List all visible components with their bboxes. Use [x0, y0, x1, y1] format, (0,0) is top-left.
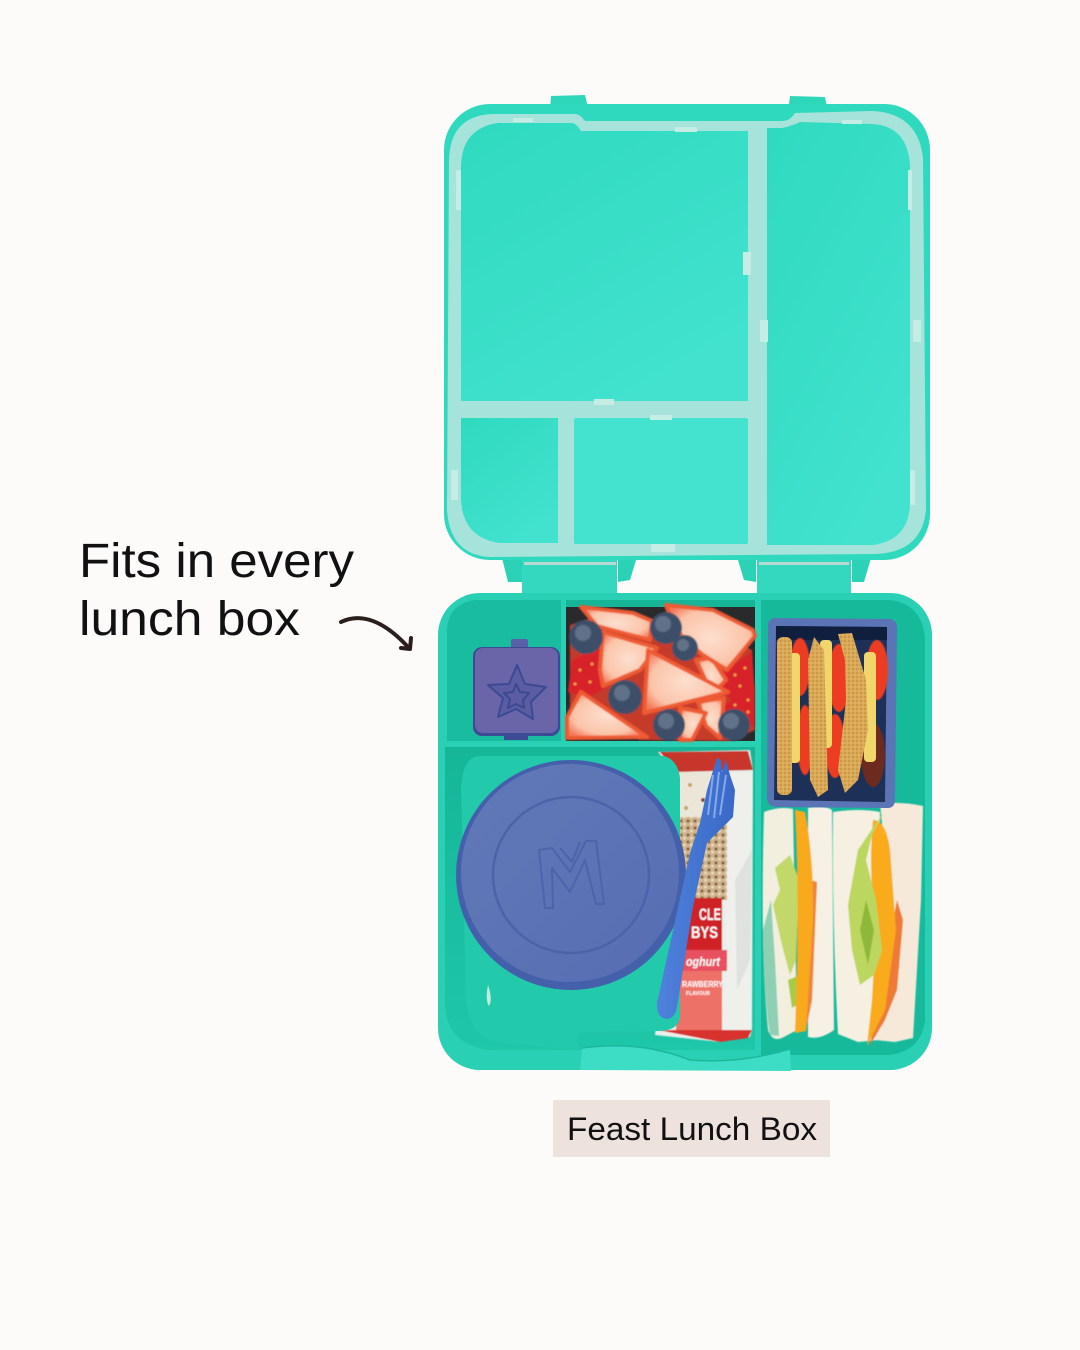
arrow: pointing to lunch box [341, 618, 411, 649]
lid compartment: right [767, 122, 910, 545]
sandwich right [833, 803, 923, 1046]
snack bar packet: CLE [699, 905, 721, 924]
lid hinges [502, 558, 871, 594]
snack bar packet: oghurt [686, 954, 721, 969]
spread container: star lid [473, 639, 560, 740]
star emboss [488, 665, 546, 719]
base compartment: small [447, 600, 561, 741]
dark tomato [861, 723, 885, 787]
base shell [438, 593, 932, 1070]
small blue box with crackers [767, 618, 897, 808]
heading: fits in every lunch box [79, 535, 354, 646]
sandwich left [763, 807, 834, 1039]
snack bar packet: RAWBERRY [682, 980, 724, 989]
caption label: Feast Lunch Box [567, 1111, 817, 1147]
base front clasp [580, 1046, 791, 1071]
strawberry slices [567, 605, 755, 740]
tray highlight [487, 985, 491, 1006]
lid seal [447, 111, 926, 557]
heading: fits in every lunch box: lunch box [79, 593, 300, 646]
logo M emboss [539, 841, 604, 908]
fork [657, 758, 735, 1019]
heading: fits in every lunch box: Fits in every [79, 535, 354, 588]
caption label [553, 1100, 830, 1157]
fruit underlay [570, 615, 755, 741]
box [767, 618, 897, 808]
base compartment: main [445, 747, 755, 1050]
lid shell [444, 104, 930, 560]
container lid: round blue [456, 760, 686, 990]
lunch box base [438, 593, 932, 1070]
lunch box lid [444, 95, 930, 594]
snack bar packet [655, 750, 753, 1042]
crackers [777, 633, 868, 797]
tomato slices [790, 638, 888, 778]
raised tray [461, 756, 680, 1050]
lid compartment: wide [574, 418, 748, 544]
base compartment: right [761, 600, 925, 1055]
snack bar packet: BYS [691, 923, 718, 942]
lid tabs [550, 95, 828, 112]
fruit: strawberries and blueberries [567, 605, 755, 741]
lid compartment: main [461, 123, 748, 401]
cheese slices [789, 640, 876, 763]
whole strawberries [568, 646, 755, 728]
lid compartment: small [461, 418, 558, 543]
blueberries [569, 612, 750, 741]
snack bar packet: FLAVOUR [686, 991, 710, 997]
base compartment: fruit [566, 600, 755, 741]
sandwiches [763, 803, 923, 1046]
lid ring [493, 797, 649, 953]
lid seal details [451, 118, 921, 552]
